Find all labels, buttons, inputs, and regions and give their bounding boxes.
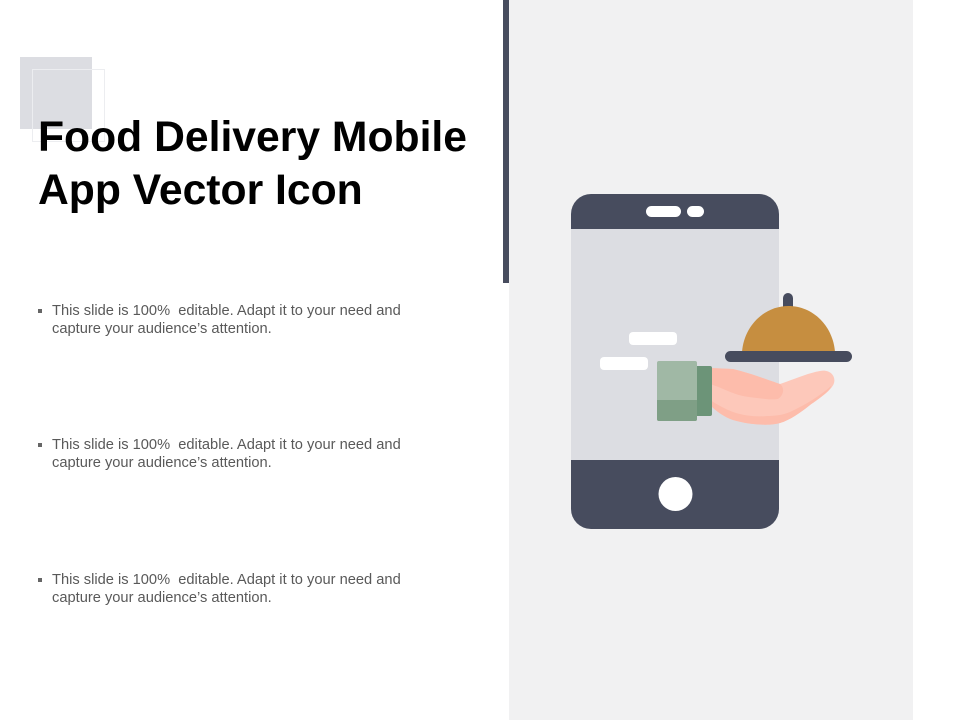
icon: sleeve	[657, 361, 712, 421]
text block 1: This slide is 100% editable. Adapt it to your need and capture your audience’s attention.	[52, 303, 401, 337]
speed lines	[600, 332, 677, 370]
title: App Vector Icon	[38, 166, 363, 214]
phone	[571, 194, 779, 529]
text block 2: This slide is 100% editable. Adapt it to your need and capture your audience’s attention.	[52, 437, 401, 471]
icon: serving cloche	[725, 293, 852, 362]
decorative squares	[20, 57, 105, 142]
title: Food Delivery Mobile	[38, 113, 467, 161]
icon: food delivery phone	[571, 194, 852, 529]
right background panel	[509, 0, 913, 720]
icon: hand	[710, 368, 834, 425]
title	[38, 113, 467, 214]
vertical accent bar	[503, 0, 509, 283]
text block 3: This slide is 100% editable. Adapt it to your need and capture your audience’s attention.	[52, 572, 401, 606]
